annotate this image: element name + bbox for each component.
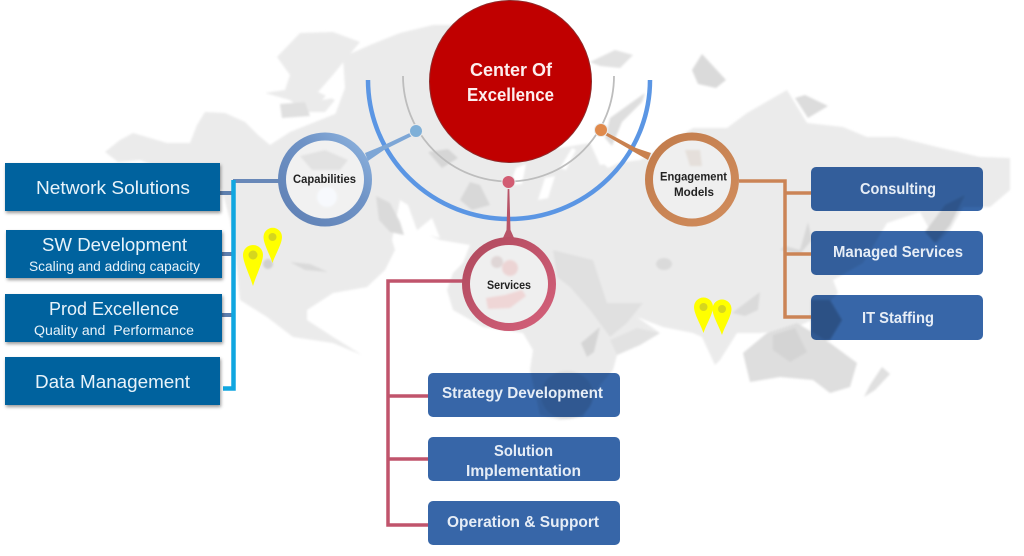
icon: map pin east 2	[712, 300, 732, 335]
label: capabilities: Capabilities	[293, 174, 356, 186]
icon: map pin west 2	[264, 228, 282, 263]
ring detail: engagement	[685, 150, 702, 166]
world map background	[105, 25, 1010, 420]
box: managed services	[811, 231, 983, 275]
map: arctic north blob	[265, 32, 360, 112]
map: japan and coast	[780, 222, 812, 254]
map: iceland	[428, 149, 458, 168]
box: sw development: SW Development	[42, 235, 187, 255]
map: australia	[743, 323, 857, 393]
center label: Center Of	[470, 59, 553, 80]
map: greenland shadow	[376, 196, 404, 235]
map: caspian	[656, 258, 672, 270]
node dot: services	[502, 176, 515, 188]
map: severnaya	[795, 95, 828, 118]
map: new zealand	[864, 367, 890, 397]
map: middle east	[553, 250, 643, 337]
box: managed services: Managed Services	[833, 244, 963, 261]
ring: capabilities	[282, 136, 368, 222]
center label: Excellence	[467, 84, 554, 105]
inner grey arc	[403, 76, 614, 182]
map: franz josef	[692, 54, 726, 88]
label: engagement models	[660, 170, 727, 199]
label: services: Services	[487, 280, 531, 292]
box: sw development	[6, 230, 222, 278]
outer blue arc	[368, 80, 650, 219]
ring detail: capabilities	[300, 150, 348, 170]
connector stem: capabilities	[365, 131, 416, 161]
box: prod excellence: Prod Excellence	[49, 299, 179, 319]
map: novaya zemlya	[605, 93, 645, 146]
map: svalbard	[590, 50, 633, 68]
map: arabia	[610, 328, 660, 355]
map: kamchatka under box	[925, 195, 965, 243]
connector: capabilities lines	[220, 180, 279, 388]
connector stem: services	[502, 188, 515, 240]
box: data management: Data Management	[35, 372, 190, 392]
map: great lake	[263, 259, 273, 269]
box: consulting	[811, 167, 983, 211]
box: solution implementation: Implementation	[466, 463, 581, 480]
box: strategy development	[428, 373, 620, 417]
ring detail: services cog	[491, 256, 503, 268]
node dot: capabilities	[410, 124, 422, 138]
node: engagement models	[594, 124, 735, 222]
map: hudson islands	[280, 102, 310, 118]
box: it staffing	[811, 295, 983, 340]
node: capabilities	[282, 124, 422, 222]
box: consulting: Consulting	[860, 181, 936, 198]
icon: map pin east 1	[694, 298, 713, 333]
node: services	[466, 176, 552, 327]
label: engagement models: Engagement	[660, 170, 727, 184]
box: data management	[5, 357, 220, 405]
box: network solutions	[5, 163, 220, 211]
box: network solutions: Network Solutions	[36, 178, 190, 198]
box: it staffing: IT Staffing	[862, 310, 934, 327]
ring detail: services hand	[486, 290, 526, 309]
box: operation and support: Operation & Support	[447, 514, 600, 531]
ring: services	[466, 241, 552, 327]
connector: services lines	[388, 281, 463, 525]
node dot: engagement	[594, 124, 608, 136]
ring: engagement	[649, 136, 735, 222]
map: british isles	[460, 182, 490, 210]
map: northern landmass	[335, 25, 480, 140]
connector stem: engagement	[600, 130, 651, 160]
box: solution implementation	[428, 437, 620, 481]
center circle	[430, 0, 592, 162]
map: north america and central land	[105, 90, 1010, 420]
map: dark coast under it staffing	[811, 300, 842, 340]
box: solution implementation: Solution	[494, 443, 553, 460]
map: cuba	[290, 262, 328, 272]
map: southeast asia	[732, 292, 760, 316]
map: central australia	[773, 328, 807, 362]
map: madagascar	[581, 327, 600, 357]
icon: map pin west 1	[243, 245, 263, 286]
box: prod excellence: Quality and Performance	[34, 323, 194, 338]
label: engagement models: Models	[674, 185, 714, 199]
box: sw development: Scaling and adding capacity	[29, 259, 200, 274]
ring detail: services gear	[502, 260, 518, 276]
box: prod excellence	[5, 294, 222, 342]
connector: engagement lines	[739, 181, 811, 317]
center label	[467, 59, 554, 105]
map: white channels	[322, 82, 640, 288]
box: strategy development: Strategy Development	[442, 385, 604, 402]
box: operation and support	[428, 501, 620, 545]
map: africa tip under strategy box	[541, 371, 593, 419]
ring detail: blue cog	[317, 187, 337, 207]
